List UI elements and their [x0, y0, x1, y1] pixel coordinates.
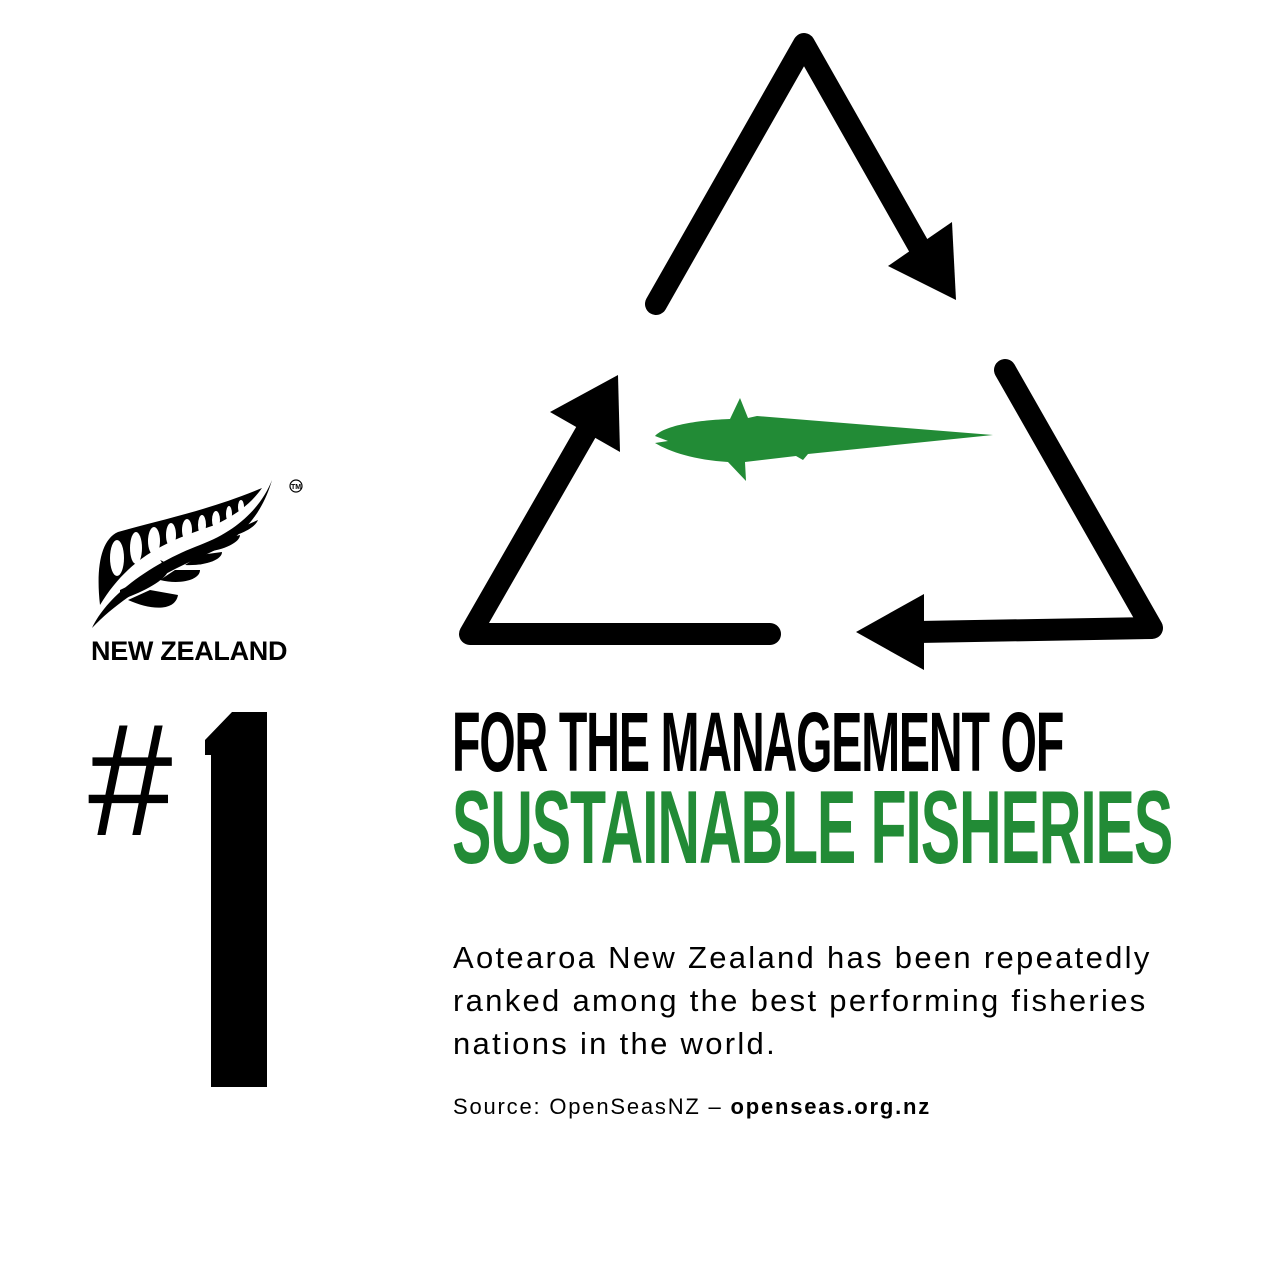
TM mark: TM — [291, 484, 301, 491]
hash symbol: # — [88, 690, 173, 869]
body text — [453, 940, 1152, 1061]
body text: nations in the world. — [453, 1026, 777, 1061]
heading line 1: FOR THE MANAGEMENT OF — [452, 695, 1063, 789]
arrow: left — [470, 375, 770, 634]
body text: Aotearoa New Zealand has been repeatedly — [453, 940, 1152, 975]
TM mark — [290, 480, 302, 492]
arrow: top — [656, 44, 956, 304]
arrow: right — [856, 370, 1152, 670]
body text: ranked among the best performing fisheries — [453, 983, 1148, 1018]
icon: green fish — [655, 398, 993, 481]
logo text: NEW ZEALAND — [91, 636, 287, 666]
heading line 2: SUSTAINABLE FISHERIES — [452, 770, 1172, 886]
source: Source: OpenSeasNZ – openseas.org.nz — [453, 1094, 931, 1119]
icon: silver fern — [92, 480, 272, 628]
big number one — [205, 712, 267, 1087]
